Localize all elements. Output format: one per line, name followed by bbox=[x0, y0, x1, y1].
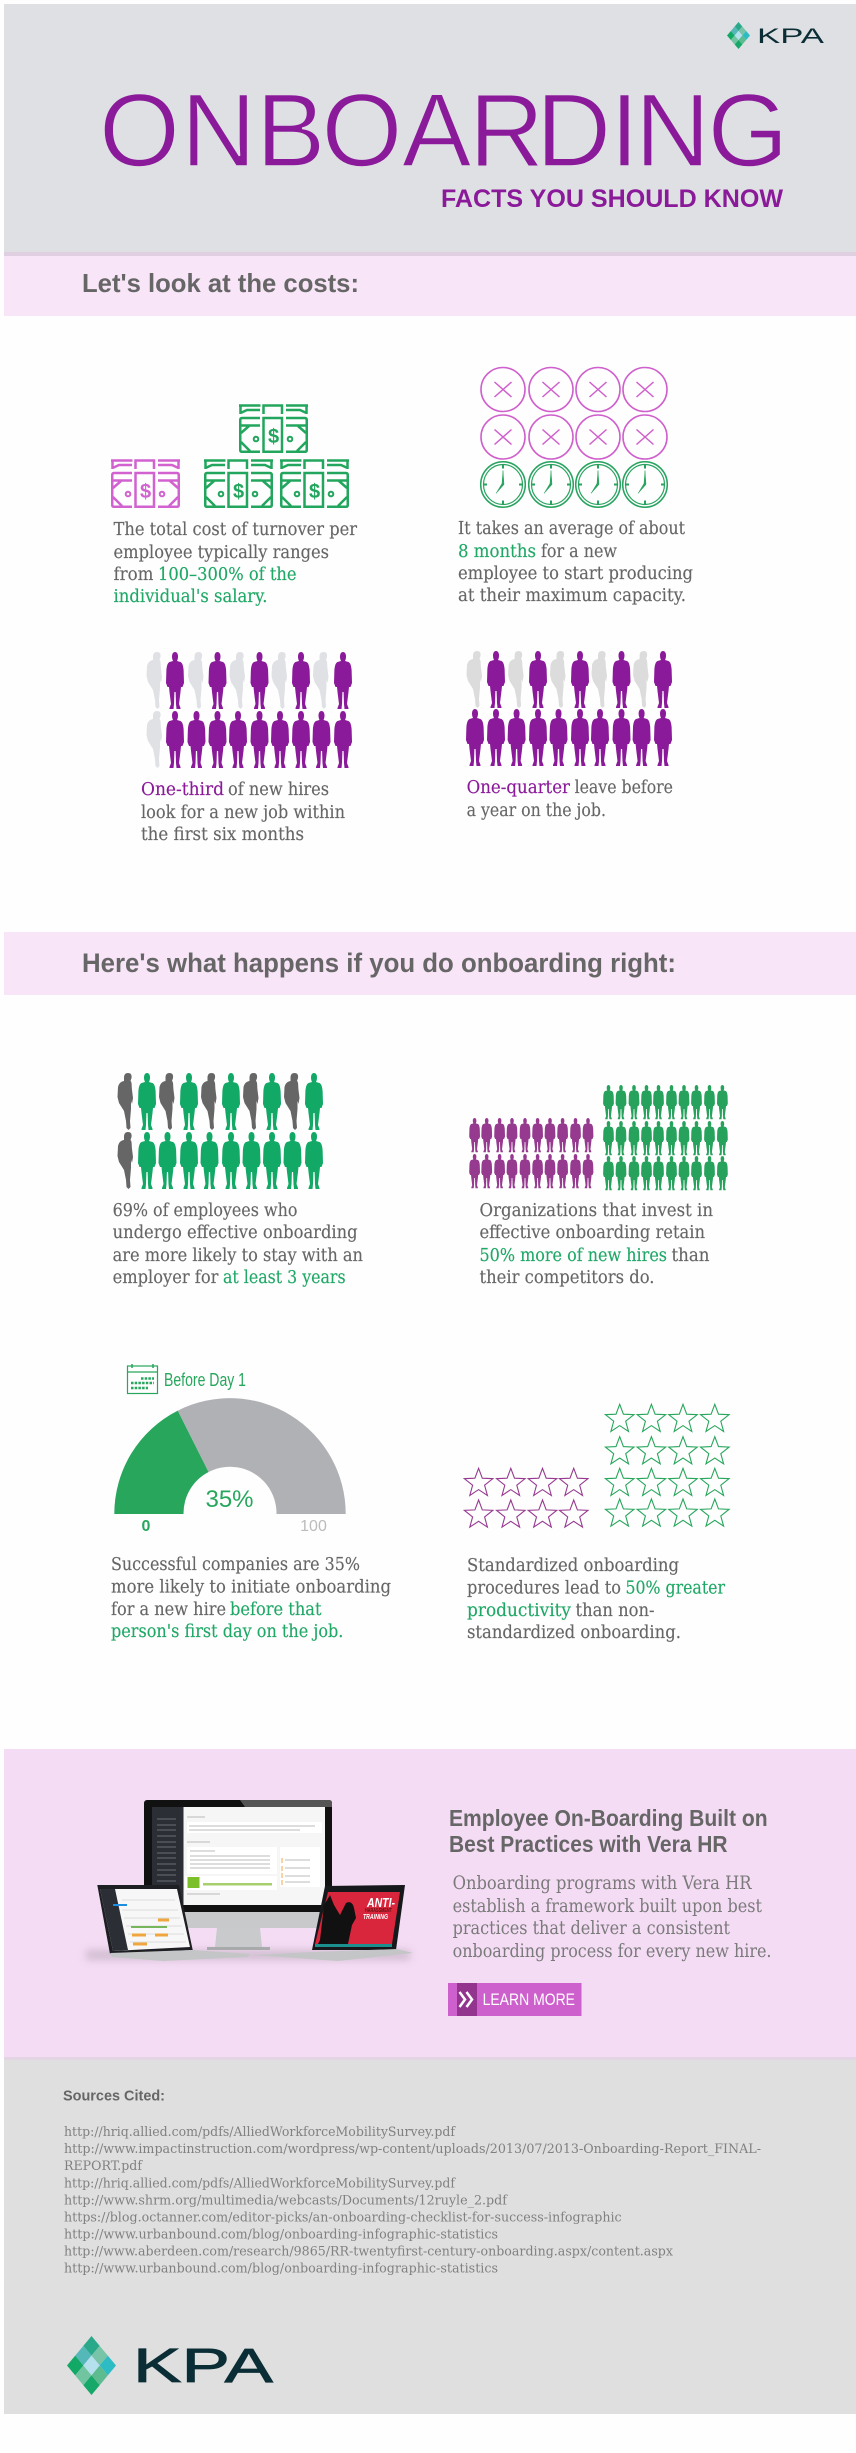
icon: people one-quarter bbox=[466, 651, 672, 766]
icon: money stacks: $ bbox=[268, 426, 279, 448]
text block: source links: http://hriq.allied.com/pdfs/AlliedWorkforceMobilitySurvey.pdf bbox=[64, 2125, 456, 2140]
icon: calendar bbox=[128, 1364, 158, 1394]
chart: gauge 35 percent: 100 bbox=[300, 1518, 327, 1535]
icon: stars comparison bbox=[464, 1404, 729, 1527]
panel: turnover cost bbox=[111, 405, 358, 607]
text block: productivity: productivity bbox=[467, 1601, 571, 1621]
icon: money stacks: $ bbox=[140, 481, 151, 503]
text block: 8 months: employee to start producing bbox=[458, 564, 693, 584]
text block: 8 months: It takes an average of about bbox=[458, 519, 685, 539]
text block: before day 1 bbox=[111, 1555, 391, 1642]
text block: source links: REPORT.pdf bbox=[64, 2159, 143, 2174]
text block: before day 1: for a new hire bbox=[111, 1600, 226, 1620]
title: ONBOARDING bbox=[99, 73, 788, 189]
text block: promo body bbox=[453, 1873, 772, 1962]
laptop: right: TRAINING bbox=[363, 1914, 388, 1921]
monitor bbox=[144, 1800, 332, 1950]
text block: 69 percent: undergo effective onboarding bbox=[113, 1223, 358, 1243]
panel: onboarding right heading band bbox=[4, 932, 856, 995]
text block: 69 percent: at least 3 years bbox=[223, 1268, 346, 1288]
text block: turnover bbox=[114, 520, 358, 607]
laptop: right: ANTI- bbox=[366, 1895, 395, 1910]
icon: money stacks: $ bbox=[233, 481, 244, 503]
chart: gauge 35 percent: 35% bbox=[205, 1486, 254, 1513]
panel: 8 months bbox=[458, 368, 693, 606]
panel: header bbox=[4, 4, 856, 256]
heading: costs: Let's look at the costs: bbox=[82, 268, 359, 298]
text block: one-quarter: leave before bbox=[575, 778, 673, 798]
text block: source links: http://www.urbanbound.com/blog/onboarding-infographic-statistics bbox=[64, 2262, 498, 2277]
heading: sources cited: Sources Cited: bbox=[63, 2088, 165, 2105]
panel: productivity bbox=[464, 1404, 729, 1643]
laptop: right bbox=[253, 1885, 413, 1961]
text block: 69 percent: employer for bbox=[113, 1268, 219, 1288]
panel: before day 1 bbox=[111, 1364, 391, 1642]
laptop: left bbox=[97, 1885, 250, 1961]
text block: retain 50 percent bbox=[480, 1201, 713, 1288]
text block: retain 50 percent: effective onboarding retain bbox=[480, 1223, 705, 1243]
text block: before day 1: person's first day on the job. bbox=[111, 1622, 343, 1642]
subtitle: FACTS YOU SHOULD KNOW bbox=[441, 185, 783, 213]
text block: 69 percent: are more likely to stay with an bbox=[113, 1246, 363, 1266]
text block: before day 1: more likely to initiate onboarding bbox=[111, 1578, 391, 1598]
text block: retain 50 percent: than bbox=[672, 1246, 710, 1266]
text block: retain 50 percent: Organizations that invest in bbox=[480, 1201, 713, 1221]
text block: 8 months bbox=[458, 519, 693, 606]
icon: small people comparison bbox=[469, 1085, 728, 1190]
text block: before day 1: before that bbox=[230, 1600, 322, 1620]
text block: source links: http://www.shrm.org/multimedia/webcasts/Documents/12ruyle_2.pdf bbox=[64, 2194, 508, 2209]
heading: employee on-boarding bbox=[449, 1805, 768, 1857]
text block: one-third: of new hires bbox=[228, 780, 329, 800]
logo: KPA top bbox=[727, 22, 824, 49]
panel: one-quarter bbox=[466, 651, 673, 821]
text block: 8 months: 8 months bbox=[458, 542, 536, 562]
text block: one-third bbox=[141, 780, 345, 845]
text block: one-quarter: a year on the job. bbox=[467, 801, 606, 821]
text block: source links bbox=[64, 2125, 761, 2277]
text block: turnover: employee typically ranges bbox=[114, 543, 329, 563]
text block: retain 50 percent: their competitors do. bbox=[480, 1268, 654, 1288]
text block: productivity: procedures lead to bbox=[467, 1579, 621, 1599]
button: learn more bbox=[448, 1983, 582, 2016]
laptop: right: HARASSMENT bbox=[365, 1908, 392, 1914]
logo: KPA bottom bbox=[67, 2336, 273, 2395]
text block: turnover: The total cost of turnover per bbox=[114, 520, 358, 540]
text block: source links: http://www.impactinstruction.com/wordpress/wp-content/uploads/2013/07/2013-Onboarding-Report_FINAL- bbox=[64, 2142, 761, 2157]
label: before day 1: Before Day 1 bbox=[164, 1370, 246, 1390]
text block: one-quarter: One-quarter bbox=[467, 778, 571, 798]
text block: source links: https://blog.octanner.com/editor-picks/an-onboarding-checklist-for-success-infographic bbox=[64, 2211, 622, 2226]
text block: one-third: look for a new job within bbox=[141, 803, 345, 823]
text block: productivity: standardized onboarding. bbox=[467, 1623, 681, 1643]
icon: money stacks: $ bbox=[309, 481, 320, 503]
text block: retain 50 percent: 50% more of new hires bbox=[480, 1246, 667, 1266]
text block: promo body: onboarding process for every new hire. bbox=[453, 1941, 772, 1962]
panel: 69 percent bbox=[113, 1073, 363, 1288]
text block: productivity: 50% greater bbox=[626, 1579, 726, 1599]
text block: 69 percent: 69% of employees who bbox=[113, 1201, 297, 1221]
icon: people 69 percent bbox=[118, 1073, 323, 1189]
panel: sources bbox=[4, 2060, 856, 2414]
panel: one-third bbox=[141, 652, 352, 845]
chart: gauge 35 percent bbox=[114, 1398, 346, 1535]
text block: 69 percent bbox=[113, 1201, 363, 1288]
text block: source links: http://www.aberdeen.com/research/9865/RR-twentyfirst-century-onboarding.aspx/content.aspx bbox=[64, 2245, 674, 2260]
text block: promo body: practices that deliver a consistent bbox=[453, 1918, 730, 1939]
text block: productivity: Standardized onboarding bbox=[467, 1556, 679, 1576]
panel: Vera HR promo bbox=[4, 1749, 856, 2060]
text block: source links: http://hriq.allied.com/pdfs/AlliedWorkforceMobilitySurvey.pdf bbox=[64, 2177, 456, 2192]
text block: one-quarter bbox=[467, 778, 673, 821]
text block: productivity: than non- bbox=[576, 1601, 655, 1621]
text block: 8 months: for a new bbox=[541, 542, 617, 562]
text block: promo body: establish a framework built upon best bbox=[453, 1896, 762, 1917]
text block: one-third: the first six months bbox=[141, 825, 304, 845]
heading: onboarding right: Here's what happens if you do onboarding right: bbox=[82, 948, 676, 978]
heading: employee on-boarding: Best Practices with Vera HR bbox=[449, 1831, 728, 1857]
icon: crossed circles and clocks bbox=[481, 368, 667, 507]
panel: costs heading band bbox=[4, 256, 856, 316]
icon: devices illustration bbox=[86, 1800, 413, 1961]
chart: gauge 35 percent: 0 bbox=[142, 1518, 151, 1535]
logo: KPA bottom: KPA bbox=[133, 2340, 273, 2393]
text block: productivity bbox=[467, 1556, 726, 1643]
text block: turnover: from bbox=[114, 565, 154, 585]
button: learn more: LEARN MORE bbox=[483, 1990, 575, 2009]
icon: people one-third bbox=[146, 652, 352, 768]
icon: money stacks bbox=[111, 405, 349, 507]
text block: promo body: Onboarding programs with Vera HR bbox=[453, 1873, 753, 1894]
logo: KPA top: KPA bbox=[757, 25, 824, 48]
panel: retain 50 percent bbox=[469, 1085, 728, 1288]
heading: employee on-boarding: Employee On-Boarding Built on bbox=[449, 1805, 768, 1831]
text block: 8 months: at their maximum capacity. bbox=[458, 586, 686, 606]
text block: one-third: One-third bbox=[141, 780, 224, 800]
text block: turnover: individual's salary. bbox=[114, 587, 268, 607]
text block: before day 1: Successful companies are 35% bbox=[111, 1555, 360, 1575]
text block: turnover: 100–300% of the bbox=[158, 565, 296, 585]
text block: source links: http://www.urbanbound.com/blog/onboarding-infographic-statistics bbox=[64, 2228, 498, 2243]
